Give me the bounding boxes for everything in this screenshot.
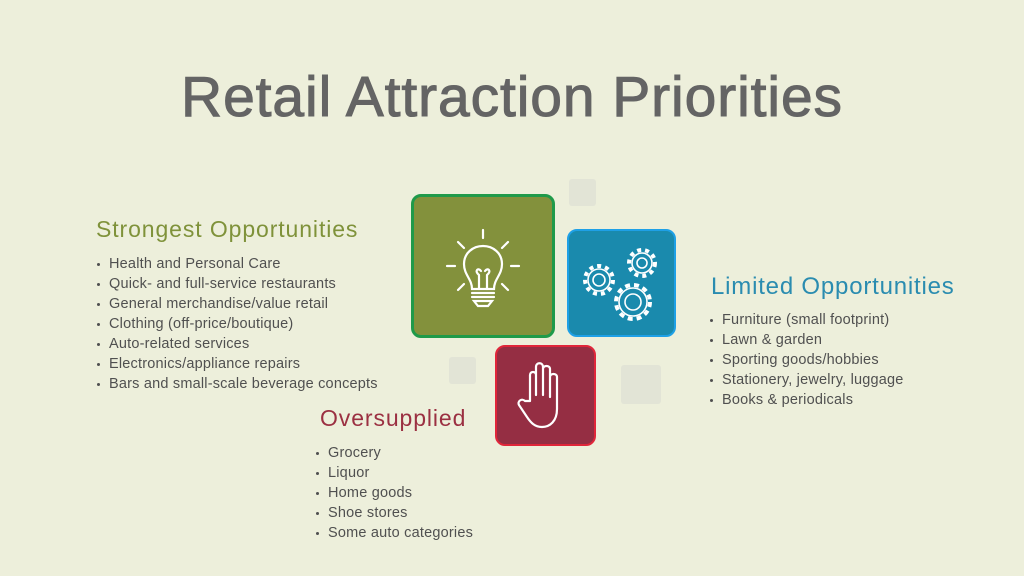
list: limited: Books & periodicals	[722, 392, 853, 408]
list: strongest: Clothing (off-price/boutique)	[109, 316, 293, 332]
list: strongest: General merchandise/value retail	[109, 296, 328, 312]
list: oversupplied: Grocery	[328, 445, 381, 461]
list: strongest: Health and Personal Care	[109, 256, 281, 272]
list: oversupplied: Shoe stores	[328, 505, 408, 521]
list: strongest	[97, 256, 378, 392]
list: limited: Lawn & garden	[722, 332, 822, 348]
decorative gray square	[569, 179, 596, 206]
list: strongest: Bars and small-scale beverage concepts	[109, 376, 378, 392]
list: limited: Sporting goods/hobbies	[722, 352, 879, 368]
list: strongest: Auto-related services	[109, 336, 249, 352]
list: oversupplied: Liquor	[328, 465, 370, 481]
list: strongest: Electronics/appliance repairs	[109, 356, 300, 372]
list: limited: Furniture (small footprint)	[722, 312, 889, 328]
icon tile: hand	[495, 345, 596, 446]
list: oversupplied: Home goods	[328, 485, 412, 501]
icon tile: lightbulb	[411, 194, 555, 338]
list: oversupplied	[316, 445, 473, 541]
icon tile: gears	[567, 229, 676, 337]
list: oversupplied: Some auto categories	[328, 525, 473, 541]
list: strongest: Quick- and full-service restaurants	[109, 276, 336, 292]
list: limited: Stationery, jewelry, luggage	[722, 372, 904, 388]
heading: Strongest Opportunities: Strongest Opportunities	[96, 216, 358, 242]
heading: Oversupplied: Oversupplied	[320, 405, 466, 431]
heading: Limited Opportunities: Limited Opportunities	[711, 273, 955, 300]
title: Retail Attraction Priorities	[181, 65, 843, 129]
decorative gray square	[621, 365, 661, 404]
decorative gray square	[449, 357, 476, 384]
list: limited	[710, 312, 904, 408]
